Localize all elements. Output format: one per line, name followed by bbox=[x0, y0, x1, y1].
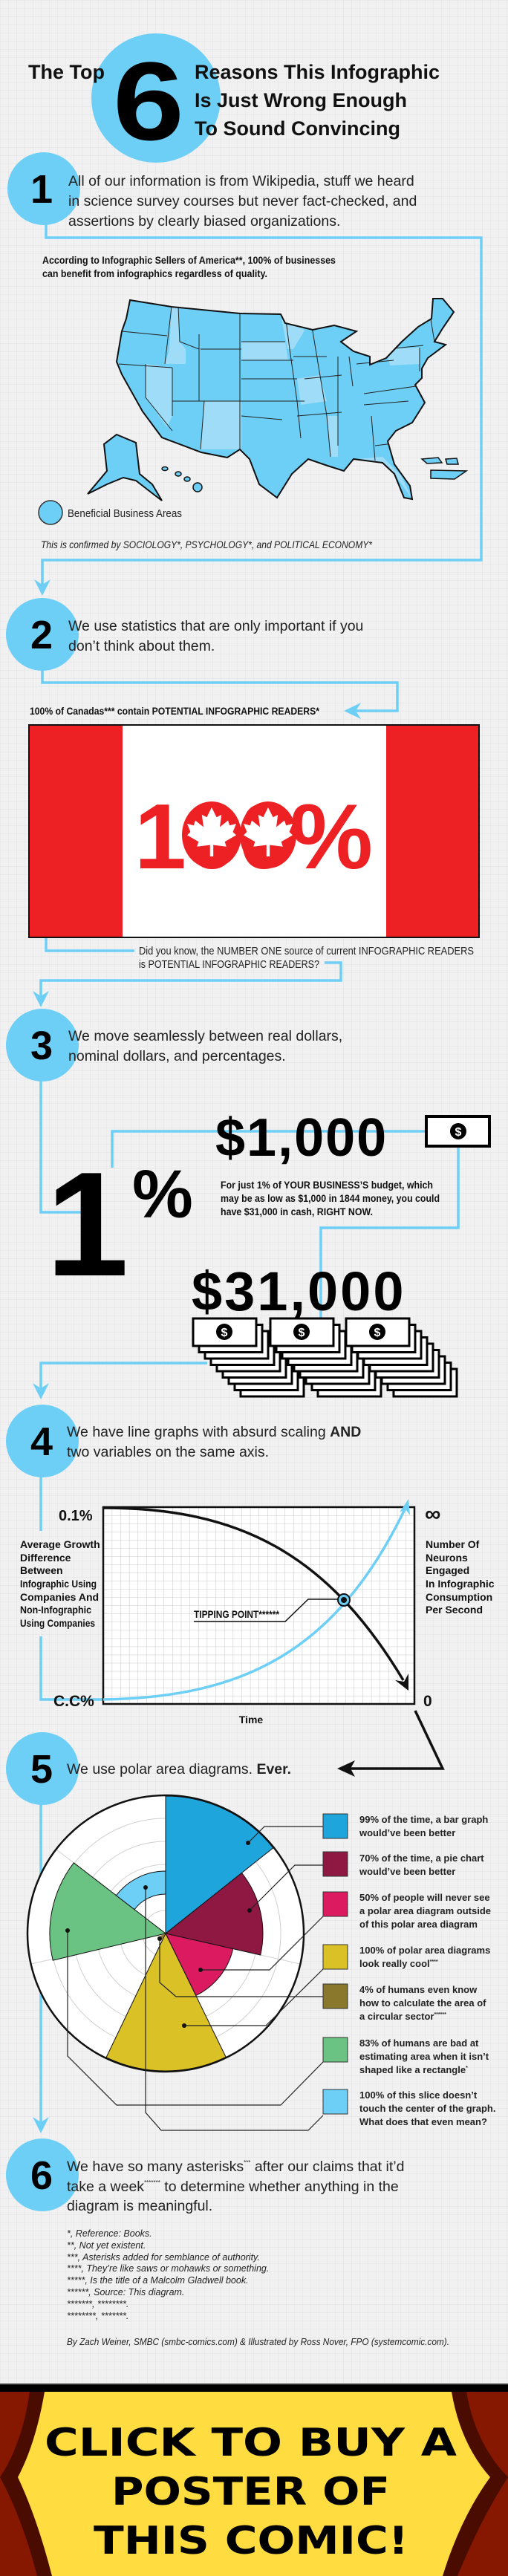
left axis title: Average Growth bbox=[20, 1538, 100, 1550]
footnotes: *******, ********. bbox=[67, 2299, 128, 2309]
polar legend: 70% of the time, a pie chart bbox=[359, 1853, 484, 1864]
section 1 number circle: 1 bbox=[30, 167, 53, 212]
section 4 number circle: 4 bbox=[30, 1419, 53, 1464]
left axis title: Infographic Using bbox=[20, 1578, 97, 1590]
section 3 heading: nominal dollars, and percentages. bbox=[68, 1048, 286, 1064]
section 3 heading bbox=[68, 1028, 342, 1064]
polar legend: 50% of people will never see bbox=[359, 1892, 490, 1903]
section 2 number circle bbox=[6, 598, 79, 671]
section 6 heading: diagram is meaningful. bbox=[67, 2198, 212, 2214]
budget text: have $31,000 in cash, RIGHT NOW. bbox=[221, 1206, 373, 1217]
footnotes: ********, *******. bbox=[67, 2311, 128, 2321]
section 2 heading: don’t think about them. bbox=[68, 638, 215, 654]
line chart bbox=[103, 1499, 414, 1704]
poster banner bbox=[0, 2383, 508, 2576]
polar legend: how to calculate the area of bbox=[359, 1997, 486, 2009]
budget text bbox=[221, 1179, 440, 1217]
icon: single bill bbox=[426, 1116, 489, 1146]
legend leader lines bbox=[68, 1827, 323, 2130]
map caption: According to Infographic Sellers of America**, 100% of businesses bbox=[42, 254, 336, 266]
right axis title: Engaged bbox=[426, 1564, 469, 1576]
section 3 number circle bbox=[6, 1009, 79, 1082]
poster banner: CLICK TO BUY A bbox=[45, 2421, 457, 2465]
polar legend: touch the center of the graph. bbox=[359, 2103, 495, 2114]
polar legend: * bbox=[466, 2066, 468, 2071]
US map bbox=[88, 293, 466, 505]
section 1 number circle bbox=[7, 152, 80, 225]
footnotes: *, Reference: Books. bbox=[67, 2228, 152, 2239]
left axis title: Non-Infographic bbox=[20, 1604, 91, 1616]
section 1 heading: All of our information is from Wikipedia, stuff we heard bbox=[68, 173, 414, 189]
right axis title: In Infographic bbox=[426, 1578, 495, 1590]
poster banner: POSTER OF bbox=[111, 2470, 390, 2514]
chart axis labels: Time bbox=[239, 1714, 263, 1726]
title bbox=[28, 33, 440, 163]
right axis title: Neurons bbox=[426, 1552, 468, 1564]
polar legend: would’ve been better bbox=[359, 1866, 455, 1877]
polar legend: a polar area diagram outside bbox=[359, 1905, 491, 1916]
chart axis labels: ∞ bbox=[425, 1502, 440, 1526]
polar legend: 99% of the time, a bar graph bbox=[359, 1814, 488, 1825]
arrowheads bbox=[33, 579, 361, 2133]
section 2 heading bbox=[68, 618, 363, 654]
footnotes: *****, Is the title of a Malcolm Gladwell book. bbox=[67, 2275, 249, 2286]
chart axis labels: C.C% bbox=[53, 1693, 94, 1710]
polar legend bbox=[323, 1814, 495, 2127]
flag note: Did you know, the NUMBER ONE source of current INFOGRAPHIC READERS bbox=[139, 946, 474, 957]
section 6 heading: after our claims that it’d bbox=[250, 2159, 404, 2175]
map caption bbox=[42, 254, 336, 279]
$31,000: $31,000 bbox=[192, 1261, 406, 1322]
right axis title: Consumption bbox=[426, 1591, 492, 1603]
section 1 heading bbox=[68, 173, 417, 230]
section 5 heading: We use polar area diagrams. Ever. bbox=[67, 1761, 291, 1777]
title: The Top bbox=[28, 61, 105, 83]
map caption: can benefit from infographics regardless of quality. bbox=[42, 267, 267, 279]
right axis title: Number Of bbox=[426, 1538, 480, 1550]
section 5 number circle: 5 bbox=[30, 1747, 53, 1792]
polar legend: would’ve been better bbox=[359, 1827, 455, 1838]
section 1 heading: in science survey courses but never fact-checked, and bbox=[68, 193, 417, 209]
footnotes bbox=[67, 2228, 269, 2321]
flag note bbox=[139, 946, 474, 971]
section 3 number circle: 3 bbox=[30, 1024, 53, 1068]
canada flag: 100% bbox=[134, 786, 373, 888]
polar legend: shaped like a rectangle bbox=[359, 2064, 466, 2075]
$1,000: $1,000 bbox=[215, 1108, 388, 1168]
left axis title: Companies And bbox=[20, 1591, 99, 1603]
arrow: chart to section 5 bbox=[337, 1711, 443, 1777]
chart axis labels bbox=[53, 1502, 440, 1726]
icon: money stacks: $ bbox=[299, 1327, 305, 1339]
polar legend: 83% of humans are bad at bbox=[359, 2037, 479, 2049]
canada flag bbox=[29, 725, 479, 937]
icon: money stacks: $ bbox=[221, 1327, 228, 1339]
section 2 heading: We use statistics that are only important if you bbox=[68, 618, 363, 634]
map legend bbox=[39, 501, 182, 524]
polar area diagram bbox=[27, 1795, 304, 2072]
polar legend: look really cool bbox=[359, 1958, 430, 1969]
polar legend: a circular sector bbox=[359, 2011, 434, 2022]
footnotes: ***, Asterisks added for semblance of authority. bbox=[67, 2252, 260, 2263]
chart axis labels: 0 bbox=[423, 1693, 432, 1710]
section 6 heading bbox=[67, 2159, 404, 2214]
section 3 heading: We move seamlessly between real dollars, bbox=[68, 1028, 342, 1044]
section 4 number circle bbox=[6, 1405, 79, 1477]
section 6 heading: to determine whether anything in the bbox=[160, 2179, 399, 2195]
polar legend: estimating area when it isn’t bbox=[359, 2051, 489, 2062]
section 6 number circle: 6 bbox=[30, 2153, 53, 2198]
line chart: TIPPING POINT****** bbox=[194, 1608, 279, 1620]
polar legend: 4% of humans even know bbox=[359, 1984, 478, 1995]
title: 6 bbox=[113, 39, 184, 163]
section 5 number circle bbox=[6, 1732, 79, 1805]
map legend: Beneficial Business Areas bbox=[68, 508, 182, 520]
footnotes: ******, Source: This diagram. bbox=[67, 2287, 184, 2297]
section 6 heading: take a week bbox=[67, 2179, 144, 2195]
section 6 number circle bbox=[6, 2138, 79, 2211]
flag note: is POTENTIAL INFOGRAPHIC READERS? bbox=[139, 959, 319, 971]
footnotes: ****, They’re like saws or mohawks or something. bbox=[67, 2263, 269, 2274]
polar legend: 100% of polar area diagrams bbox=[359, 1945, 490, 1956]
section 4 heading: We have line graphs with absurd scaling AND bbox=[67, 1424, 361, 1440]
icon: money stacks bbox=[193, 1318, 457, 1396]
budget text: may be as low as $1,000 in 1844 money, you could bbox=[221, 1192, 440, 1204]
left axis title bbox=[20, 1538, 100, 1629]
credits: By Zach Weiner, SMBC (smbc-comics.com) & Illustrated by Ross Nover, FPO (systemcomic.com). bbox=[67, 2336, 449, 2347]
title: To Sound Convincing bbox=[195, 117, 400, 140]
icon: single bill: $ bbox=[455, 1126, 462, 1139]
connector lines bbox=[41, 215, 481, 2124]
section 6 heading: ******* bbox=[144, 2179, 160, 2186]
title: Is Just Wrong Enough bbox=[195, 89, 407, 111]
left axis title: Using Companies bbox=[20, 1617, 95, 1629]
icon: money stacks: $ bbox=[374, 1327, 381, 1339]
budget text: For just 1% of YOUR BUSINESS’S budget, which bbox=[221, 1179, 433, 1191]
polar legend: **** bbox=[430, 1959, 438, 1965]
confirmation note: This is confirmed by SOCIOLOGY*, PSYCHOLOGY*, and POLITICAL ECONOMY* bbox=[41, 539, 372, 550]
polar legend: ****** bbox=[434, 2012, 446, 2017]
section 2 number circle: 2 bbox=[30, 613, 53, 657]
left axis title: Between bbox=[20, 1564, 63, 1576]
chart axis labels: 0.1% bbox=[59, 1508, 93, 1524]
big 1%: % bbox=[132, 1157, 193, 1232]
canada caption: 100% of Canadas*** contain POTENTIAL INFOGRAPHIC READERS* bbox=[30, 706, 320, 717]
right axis title bbox=[426, 1538, 495, 1616]
left axis title: Difference bbox=[20, 1552, 71, 1564]
big 1% bbox=[46, 1142, 193, 1307]
polar legend: of this polar area diagram bbox=[359, 1919, 478, 1930]
section 6 heading: We have so many asterisks bbox=[67, 2159, 244, 2175]
polar legend: 100% of this slice doesn’t bbox=[359, 2089, 478, 2101]
section 1 heading: assertions by clearly biased organizations. bbox=[68, 213, 340, 230]
poster banner: THIS COMIC! bbox=[94, 2519, 408, 2563]
polar legend: What does that even mean? bbox=[359, 2116, 487, 2127]
title: Reasons This Infographic bbox=[195, 61, 440, 83]
section 4 heading: two variables on the same axis. bbox=[67, 1444, 269, 1460]
section 6 heading: *** bbox=[244, 2159, 250, 2166]
big 1%: 1 bbox=[46, 1142, 128, 1307]
right axis title: Per Second bbox=[426, 1604, 483, 1616]
footnotes: **, Not yet existent. bbox=[67, 2240, 146, 2251]
section 4 heading bbox=[67, 1424, 361, 1460]
